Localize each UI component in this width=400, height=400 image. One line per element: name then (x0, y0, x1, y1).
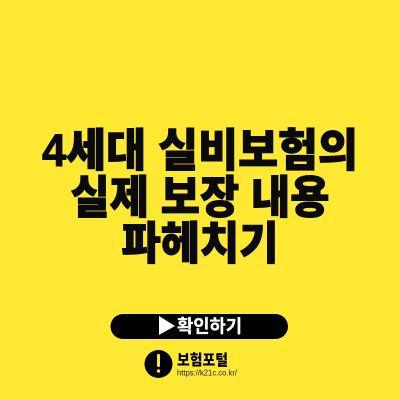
icon: exclamation circle (144, 350, 172, 378)
title: 파헤치기 (122, 218, 278, 269)
brand url: https://k21c.co.kr/ (177, 368, 238, 378)
brand block (144, 350, 238, 378)
button: confirm (110, 314, 288, 339)
icon: play triangle (159, 316, 175, 335)
title (42, 125, 358, 269)
brand name: 보험포털 (177, 351, 228, 369)
title: 실제 보장 내용 (70, 172, 330, 223)
title: 4세대 실비보험의 (42, 125, 358, 176)
button label: 확인하기 (177, 316, 242, 336)
